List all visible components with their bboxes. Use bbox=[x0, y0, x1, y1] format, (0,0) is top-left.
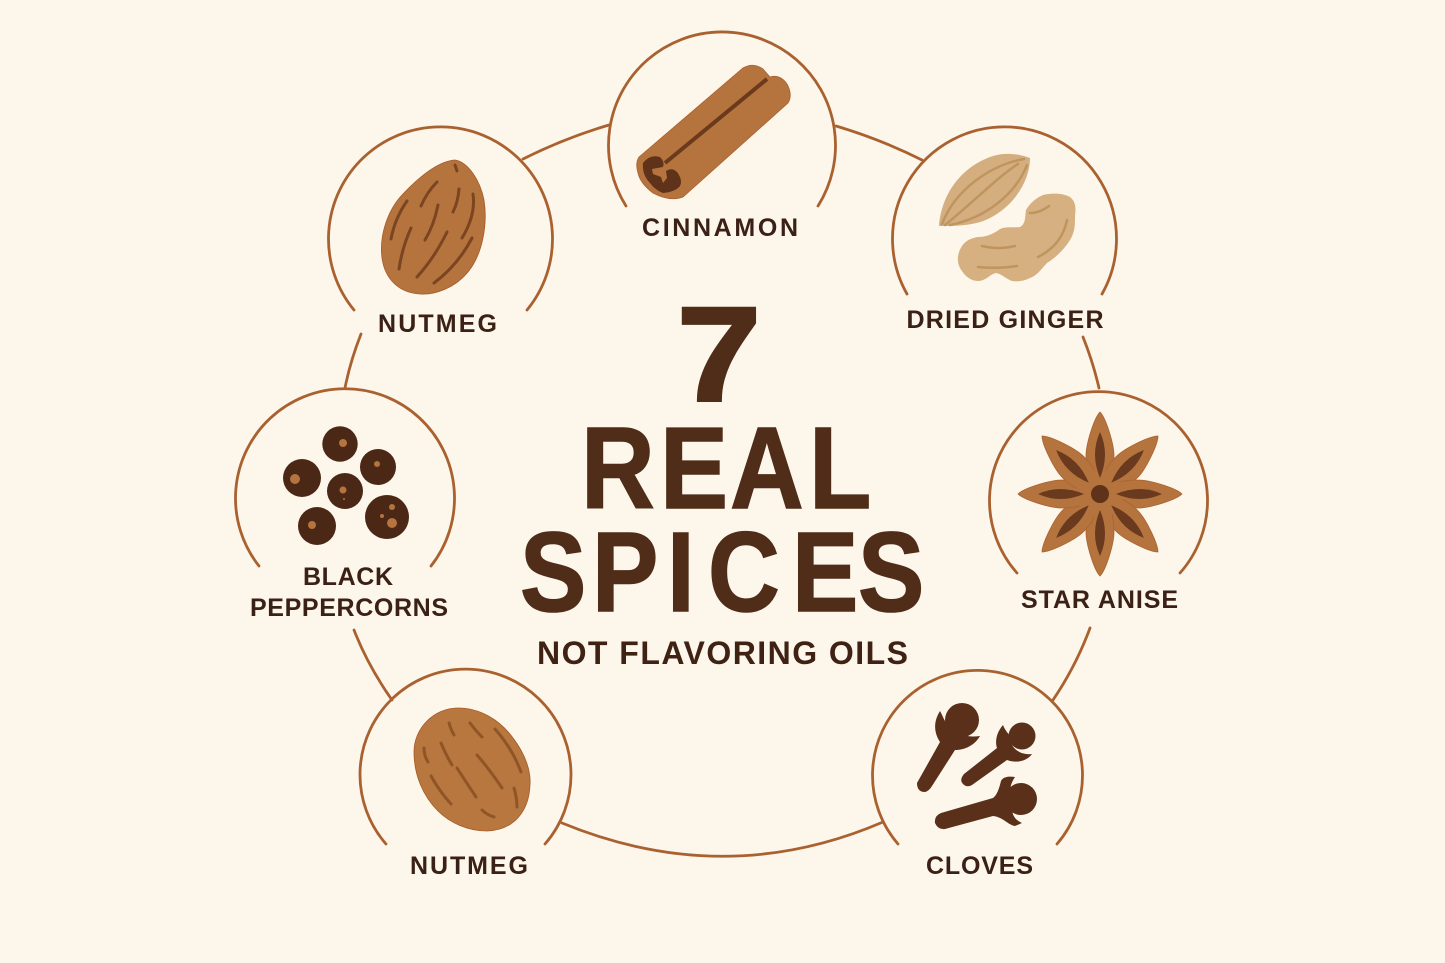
label: dried ginger: DRIED GINGER bbox=[906, 306, 1104, 334]
icon: cloves bbox=[917, 703, 1037, 829]
cloves ring bbox=[873, 670, 1083, 844]
icon: ginger slice bbox=[939, 154, 1030, 226]
label: cinnamon: CINNAMON bbox=[642, 214, 798, 242]
item: black peppercorns bbox=[235, 389, 454, 622]
item: dried ginger bbox=[892, 127, 1116, 334]
nutmeg ring bbox=[360, 669, 571, 844]
title: 7 real spices bbox=[520, 280, 924, 671]
subtitle: NOT FLAVORING OILS bbox=[537, 635, 908, 671]
icon: whole nutmeg bbox=[414, 708, 530, 831]
heading: spices: SPICES bbox=[520, 509, 924, 635]
cinnamon ring bbox=[608, 32, 836, 206]
ginger ring bbox=[892, 127, 1116, 294]
icon: star anise bbox=[1018, 412, 1182, 576]
item: cloves bbox=[873, 670, 1083, 880]
icon: peppercorns bbox=[283, 426, 409, 545]
heading: real: REAL bbox=[581, 404, 871, 533]
item: star anise bbox=[989, 392, 1208, 614]
label: nutmeg top: NUTMEG bbox=[378, 310, 497, 338]
item: cinnamon bbox=[608, 32, 836, 242]
label: cloves: CLOVES bbox=[926, 852, 1033, 880]
label: black: BLACK bbox=[303, 563, 393, 591]
peppercorns ring bbox=[235, 389, 454, 566]
big number 7: 7 bbox=[677, 280, 761, 430]
label: nutmeg bottom: NUTMEG bbox=[410, 852, 528, 880]
label: star anise: STAR ANISE bbox=[1021, 586, 1178, 614]
item: nutmeg top bbox=[329, 127, 552, 338]
icon: nutmeg seed bbox=[381, 160, 485, 294]
item: nutmeg bottom bbox=[360, 669, 571, 880]
icon: cinnamon stick bbox=[637, 65, 790, 199]
star anise ring bbox=[989, 392, 1208, 573]
connecting ring segments bbox=[345, 125, 1099, 856]
icon: ginger root bbox=[958, 194, 1075, 281]
nutmeg ring bbox=[329, 127, 552, 310]
label: peppercorns: PEPPERCORNS bbox=[250, 594, 448, 622]
